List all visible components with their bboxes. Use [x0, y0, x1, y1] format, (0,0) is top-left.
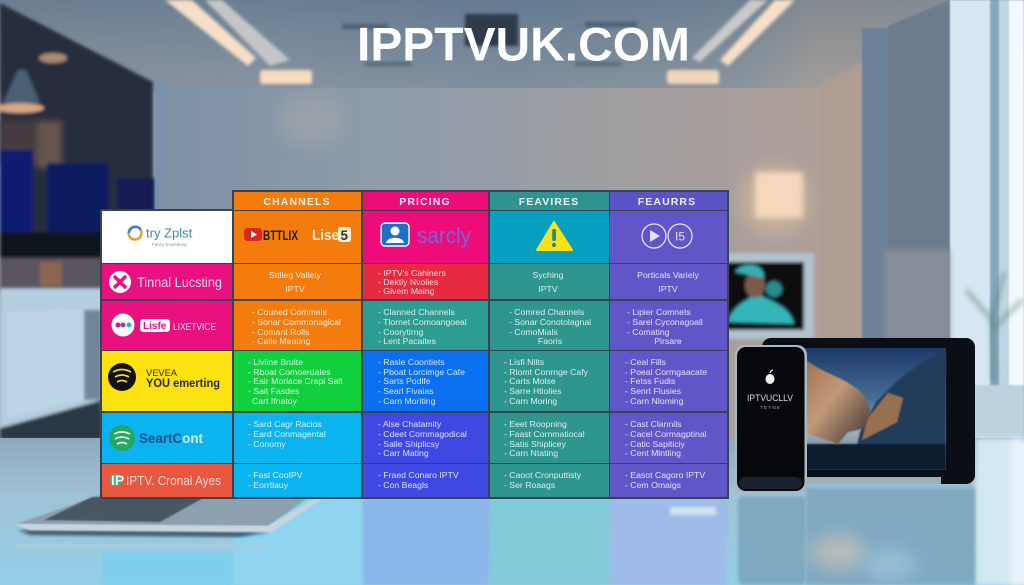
logo: Vevea You emerting: YOU emerting [146, 376, 220, 390]
phone screen text: IPTVUCLLV [747, 393, 793, 403]
logo: Bttlix and Lise 5: Lise [312, 228, 339, 244]
cell text: features: - Faast Cornmatiocal [504, 429, 585, 439]
cell text: channels: - Eair Morlace Crapi Salt [248, 376, 343, 386]
cell text: features [504, 270, 591, 490]
cell text: feaurrs: - Poeal Cormgaacate [625, 367, 707, 377]
cell text: feaurrs: - Cent Mintling [625, 448, 681, 458]
laptop body [16, 495, 312, 526]
logo: Lisfe Lixetvice: Lisfe [143, 321, 167, 332]
logo: Vevea You emerting [108, 363, 220, 391]
cell text: channels: - Fast CooIPV [248, 470, 303, 480]
cell text: feaurrs: IPTV [658, 284, 678, 294]
cell text: feaurrs [625, 270, 707, 490]
tablet with mountain wallpaper [762, 338, 975, 484]
header: features: FEAVIRES [519, 196, 579, 208]
cell text: feaurrs: - Cem Omaigs [625, 480, 682, 490]
cell text: channels: - Sard Cagr Racios [248, 419, 323, 429]
cell text: channels: Cart Ifnatoy [252, 396, 298, 406]
icon: warning triangle [537, 222, 572, 250]
logo: IPTV Cronal Ayes: IP [111, 472, 124, 488]
cell text: channels: Sttlleg Vallety [269, 270, 322, 280]
left dark window wall [0, 3, 155, 292]
logo: Vevea You emerting: VEVEA [146, 368, 178, 379]
icon: play and 15 circles: I5 [675, 230, 685, 244]
wall pillar beside dark window [155, 80, 167, 280]
table frame [100, 190, 729, 499]
cell text: feaurrs: - Fetss Fudis [625, 376, 676, 386]
laptop front edge [14, 497, 325, 532]
logo: try Zplst: Fancy Investiong [152, 242, 187, 247]
cell text: feaurrs: - Catic Sapiticiy [625, 439, 686, 449]
left label column [102, 211, 232, 497]
smartphone [735, 345, 807, 493]
cell text: pricing: - Carr Mating [378, 448, 429, 458]
cell text: channels: - Eard Conmagental [248, 429, 326, 439]
cell text: pricing: - Tlornet Comoangoeal [378, 317, 467, 327]
cell text: features: - Rlomt Conrnge Cafy [504, 367, 589, 377]
cell text: features: Faoris [538, 336, 563, 346]
table reflection on desk [102, 499, 727, 585]
left white cabinet [0, 288, 155, 440]
cell text: channels: - Calle Meating [252, 336, 311, 346]
cell text: features: - Caoot Cronputtisty [504, 470, 582, 480]
lit ridge [862, 393, 903, 440]
cell text: feaurrs: - Sarel Cyconagoall [627, 317, 703, 327]
cell text: feaurrs: Pirsare [654, 336, 682, 346]
cell text: channels: - Sonar Commonagical [252, 317, 341, 327]
cell text: features: - ComoMials [509, 327, 558, 337]
cell text: channels: - Comant Rolls [252, 327, 310, 337]
cell text: features: - Carn Ntating [504, 448, 558, 458]
cell text: pricing: - Dektiy Nvolies [378, 277, 439, 287]
logo: SeartCont [109, 425, 203, 451]
logo: IPTV Cronal Ayes: IPTV. Cronal Ayes [126, 473, 221, 488]
cell text: pricing: - Alse Chatamity [378, 419, 442, 429]
cell text: feaurrs: - Comating [627, 327, 670, 337]
column: channels [234, 192, 361, 497]
logo: Bttlix and Lise 5: 5 [340, 228, 348, 243]
ceiling [0, 0, 1024, 92]
cell text: feaurrs: - Ceal Fills [625, 357, 667, 367]
phone home bar [739, 477, 802, 489]
cell text: features: - Satis Shiplicey [504, 439, 566, 449]
column: features alternate [610, 192, 727, 497]
header: pricing: PRICING [399, 196, 451, 208]
cell text: features: Syching [533, 270, 564, 280]
cell text: pricing: - Cdeet Commagodical [378, 429, 467, 439]
cell text: feaurrs: Porticals Variely [637, 270, 699, 280]
comparison table [100, 190, 729, 499]
cell text: pricing: - Rasle Coontiets [378, 357, 445, 367]
plant [966, 272, 1022, 382]
logo: Bttlix and Lise 5 [244, 227, 351, 244]
cell text: pricing: - Searl Fivaias [378, 386, 434, 396]
cell text: pricing: - IPTV's Cahiners [378, 268, 446, 278]
logo: sarcly: sarcly [417, 223, 471, 248]
ceiling vents [342, 14, 637, 66]
title: IPPTVUK.COM [357, 18, 690, 72]
device reflections on desk [738, 488, 975, 585]
icon: apple logo [766, 370, 774, 384]
ceiling lights [165, 0, 795, 84]
cell text: pricing [378, 268, 467, 490]
laptop shadow [18, 530, 270, 537]
header: channels: CHANNELS [263, 196, 331, 208]
right wall panels and window [820, 0, 1024, 440]
cell text: pricing: - Carn Moriting [378, 396, 436, 406]
logo: try Zplst [128, 226, 193, 247]
cell text: features: - Carn Moring [504, 396, 557, 406]
cell text: features: - Eeet Roopning [504, 419, 567, 429]
cell text: feaurrs: - Carn Nloming [625, 396, 684, 406]
back wall [160, 88, 825, 443]
cell text: pricing: - Clanned Channels [378, 307, 455, 317]
cell text: pricing: - Coorytirng [378, 327, 424, 337]
wall lamp glow [739, 164, 811, 236]
desk surface [0, 438, 1024, 585]
cell text: features: IPTV [538, 284, 558, 294]
cell text: feaurrs: - Senrt Flusies [625, 386, 682, 396]
logo: try Zplst: try Zplst [146, 226, 193, 240]
mountain peak left [803, 358, 870, 444]
cell text: pricing: - Salle Shiplicsy [378, 439, 440, 449]
cell text: features: - Ser Roaags [504, 480, 556, 490]
cell text: channels: - Eorrtlauy [248, 480, 289, 490]
cell text: features: - Sonar Conotolagnal [509, 317, 591, 327]
cell text: channels: IPTV [285, 284, 305, 294]
column: features [490, 192, 609, 497]
cell text: feaurrs: - Cacel Cormagptinal [625, 429, 707, 439]
keyboard [44, 497, 205, 522]
cell text: features: - Lisfi Nilts [504, 357, 545, 367]
laptop on desk [14, 495, 325, 549]
cell text: channels: - Sait Fasdes [248, 386, 300, 396]
wall glow near left light [278, 94, 346, 146]
cell text: features: - Comred Channels [509, 307, 585, 317]
cell text: pricing: - Glvem Maing [378, 286, 435, 296]
cell text: pricing: - Sarts Podlfe [378, 376, 431, 386]
laptop edge reflection [16, 544, 266, 549]
logo: Bttlix and Lise 5: BTTLIX [263, 227, 298, 243]
cell text: pricing: - Con Beagls [378, 480, 429, 490]
logo: Lisfe Lixetvice: LIXETVICE [173, 322, 216, 333]
cell text: feaurrs: - Lipier Comnets [627, 307, 691, 317]
cell text: channels: - Liviine Bruite [248, 357, 303, 367]
logo: Tinnal Lucsting: Tinnal Lucsting [137, 275, 222, 290]
logo: Lisfe Lixetvice [112, 314, 216, 336]
logo: sarcly [381, 223, 471, 248]
tablet base edge [806, 477, 941, 484]
cell text: feaurrs: - Easot Cagoro IPTV [625, 470, 705, 480]
cell text: features: - Sarre Htiolies [504, 386, 562, 396]
dark foreground [802, 444, 946, 470]
cell text: pricing: - Fraed Conaro IPTV [378, 470, 459, 480]
logo: Tinnal Lucsting [109, 271, 222, 293]
cell text: channels [248, 270, 343, 490]
small background monitor with teal figure [724, 253, 814, 339]
cell text: pricing: - Pboat Lorcimge Cafe [378, 367, 465, 377]
faint reflected label [670, 507, 716, 515]
cell text: features: - Carts Molse [504, 376, 556, 386]
mountain peak right [856, 350, 946, 450]
cell text: channels: - Couned Commels [252, 307, 327, 317]
cell text: channels: - Rboat Comoerdales [248, 367, 331, 377]
cell text: channels: - Conomy [248, 439, 286, 449]
column: pricing [363, 192, 488, 497]
cell text: feaurrs: - Cast Clannils [625, 419, 682, 429]
logo: SeartCont: SeartCont [139, 430, 203, 446]
lower right wall fade [885, 250, 950, 440]
cell text: pricing: - Lent Pacaites [378, 336, 437, 346]
header: feaurrs: FEAURRS [638, 196, 696, 208]
icon: play and 15 circles [642, 224, 692, 248]
phone screen subtext: T E Y N E [760, 405, 780, 410]
